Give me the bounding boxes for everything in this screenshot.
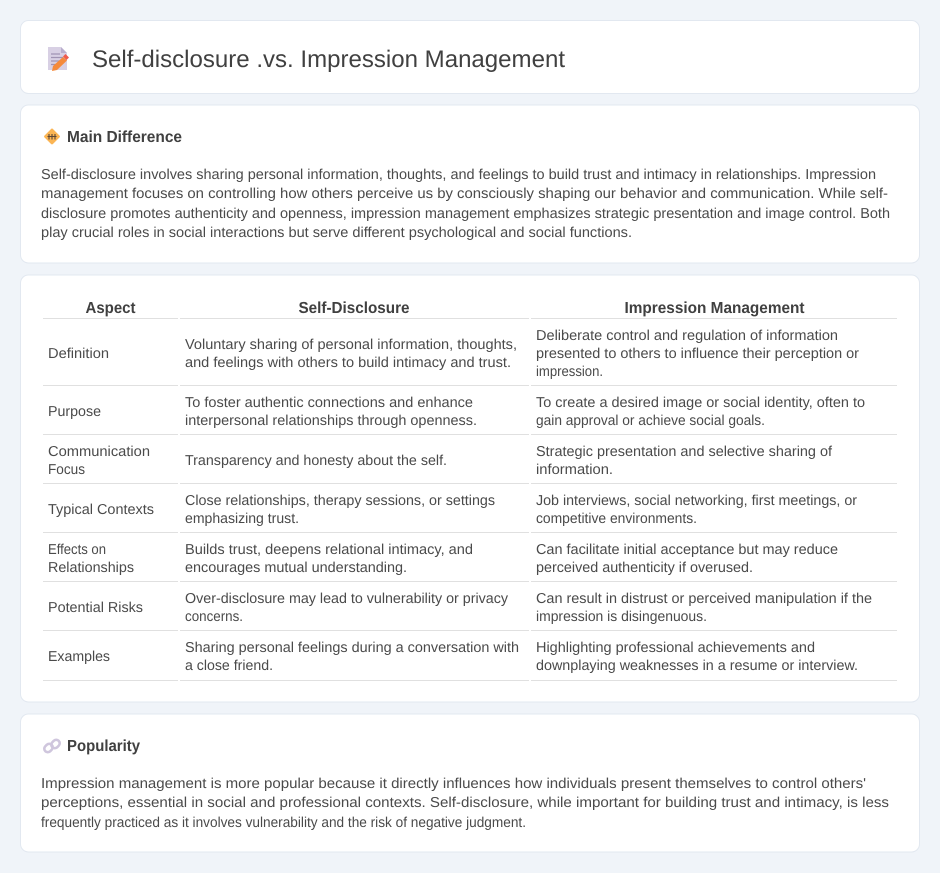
row: effects on relationships: Can facilitate initial acceptance but may reduce [536,542,838,558]
row: effects on relationships: Builds trust, deepens relational intimacy, and [185,542,473,558]
table header: Impression Management [624,300,805,317]
row: communication focus: Strategic presentation and selective sharing of [536,444,833,460]
text block: main difference [41,167,890,241]
row: examples: downplaying weaknesses in a resume or interview. [536,658,858,674]
row: effects on relationships: perceived authenticity if overused. [536,560,753,576]
row: potential risks: impression is disingenuous. [536,609,707,625]
row: typical contexts: Typical Contexts [48,502,154,518]
text block: popularity: frequently practiced as it involves vulnerability and the risk of negative judgment. [41,815,526,831]
row: purpose: To foster authentic connections and enhance [185,395,473,411]
row: potential risks: concerns. [185,609,243,625]
row: definition: Voluntary sharing of personal information, thoughts, [185,337,517,353]
row: potential risks: Over-disclosure may lead to vulnerability or privacy [185,591,509,607]
row: definition: Deliberate control and regulation of information [536,328,838,344]
row: typical contexts: Job interviews, social networking, first meetings, or [536,493,857,509]
row: purpose: Purpose [48,404,101,420]
row: definition: impression. [536,364,603,380]
row: typical contexts: emphasizing trust. [185,511,299,527]
row: communication focus: Transparency and honesty about the self. [185,453,447,469]
text block: popularity [41,776,889,831]
text block: main difference: Self-disclosure involves sharing personal information, thoughts, and feelings to build trust and intimacy in relationships. Impression [41,167,876,183]
row: communication focus [48,444,833,478]
row: purpose: interpersonal relationships through openness. [185,413,477,429]
row: definition: and feelings with others to build intimacy and trust. [185,355,511,371]
row: effects on relationships: encourages mutual understanding. [185,560,407,576]
row: purpose: To create a desired image or social identity, often to [536,395,865,411]
panel: main difference [20,105,920,263]
text block: main difference: management focuses on controlling how others perceive us by consciously shaping our behavior and communication. While self- [41,186,888,202]
icon: document with pencil [48,47,69,71]
row: definition: Definition [48,346,109,362]
row: examples [48,640,858,674]
icon: diamond sign [44,128,60,145]
row: potential risks: Potential Risks [48,600,143,616]
row: purpose: gain approval or achieve social goals. [536,413,765,429]
row: purpose [48,395,865,429]
icon: link [43,738,61,754]
table header: Self-Disclosure [298,300,410,317]
text block: main difference: disclosure promotes authenticity and openness, impression management emphasizes strategic presentation and image control. Both [41,206,890,222]
text block: main difference: play crucial roles in social interactions but serve different psychological and social functions. [41,225,632,241]
row: communication focus: information. [536,462,613,478]
row: definition: presented to others to influence their perception or [536,346,859,362]
table header [86,300,805,317]
row: typical contexts: Close relationships, therapy sessions, or settings [185,493,495,509]
row: effects on relationships: Effects on [48,542,106,558]
row: examples: Sharing personal feelings during a conversation with [185,640,519,656]
row: definition [48,328,859,380]
heading: popularity: Popularity [67,738,140,755]
panel: popularity [20,714,920,852]
heading: main difference: Main Difference [67,129,182,146]
row: typical contexts: competitive environments. [536,511,697,527]
panel: comparison table [20,275,920,702]
row: examples: Examples [48,649,110,665]
row: communication focus: Communication [48,444,150,460]
row: effects on relationships [48,542,838,576]
row: potential risks [48,591,872,625]
table header: Aspect [86,300,136,317]
panel: header [20,20,920,94]
row: examples: a close friend. [185,658,273,674]
row: effects on relationships: Relationships [48,560,134,576]
row: examples: Highlighting professional achievements and [536,640,815,656]
row: potential risks: Can result in distrust or perceived manipulation if the [536,591,872,607]
row: typical contexts [48,493,857,527]
text block: popularity: perceptions, essential in social and professional contexts. Self-disclosure, while important for building trust and intimacy, is less [41,795,889,811]
row: communication focus: Focus [48,462,85,478]
title: Self-disclosure .vs. Impression Management [92,46,565,73]
text block: popularity: Impression management is more popular because it directly influences how individuals present themselves to control others' [41,776,866,792]
